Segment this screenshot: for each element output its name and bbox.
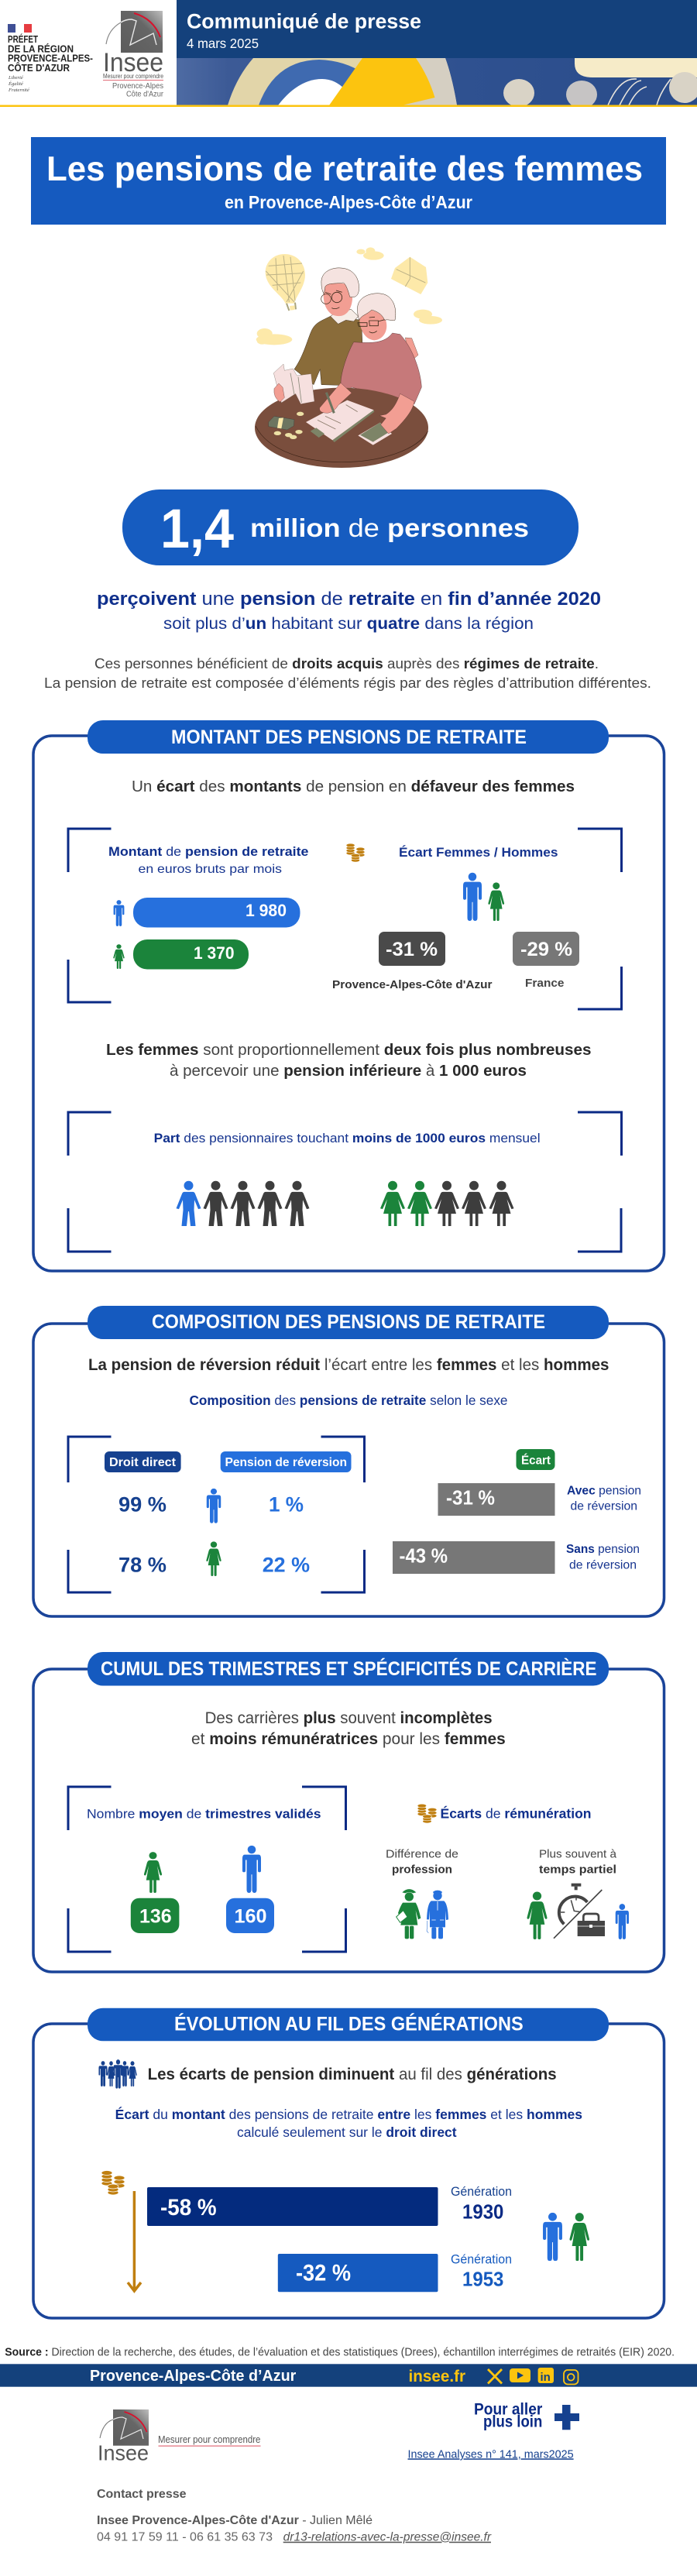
- chart title: écart: Écart Femmes / Hommes: [399, 845, 558, 860]
- main title: Les pensions de retraite des femmes: [46, 150, 643, 188]
- label: temps partiel: Plus souvent à: [539, 1847, 617, 1860]
- row: men: 1 %: [269, 1493, 304, 1516]
- press contact: Insee Provence-Alpes-Côte d'Azur - Julien Mêlé: [97, 2514, 373, 2527]
- panel: cumul des trimestres: [33, 1652, 664, 1972]
- press contact: 04 91 17 59 11 - 06 61 35 63 73: [97, 2531, 273, 2544]
- chart title: Écart du montant des pensions de retraite entre les femmes et les hommes: [115, 2106, 582, 2122]
- row: women: 78 %: [118, 1553, 167, 1576]
- section heading: [88, 2008, 609, 2041]
- section heading: MONTANT DES PENSIONS DE RETRAITE: [171, 726, 527, 748]
- intro text: definition: Ces personnes bénéficient de droits acquis auprès des régimes de retraite.: [94, 655, 599, 671]
- bar: men 1980: [114, 898, 300, 928]
- section heading: ÉVOLUTION AU FIL DES GÉNÉRATIONS: [174, 2013, 524, 2035]
- press contact: dr13-relations-avec-la-presse@insee.fr: [283, 2531, 492, 2544]
- press contact: Contact presse: [97, 2488, 187, 2501]
- intro text: definition: La pension de retraite est composée d’éléments régis par des règles d’attribution différentes.: [44, 675, 651, 691]
- bar: women 1370: 1 370: [194, 943, 234, 963]
- bar: génération 1953: Génération: [451, 2252, 512, 2266]
- column header: droit direct: [105, 1451, 181, 1472]
- intro text: recipients: perçoivent une pension de retraite en fin d’année 2020: [97, 589, 601, 610]
- section lead text: [191, 1709, 506, 1748]
- logo: Préfet de la région: CÔTE D'AZUR: [8, 62, 70, 74]
- section lead text: La pension de réversion réduit l’écart entre les femmes et les hommes: [88, 1355, 609, 1374]
- press release band: 4 mars 2025: [187, 36, 259, 51]
- intro text: recipients: [97, 589, 601, 633]
- chart title: [115, 2106, 582, 2140]
- icon: part-time woman, stopwatch, briefcase, man: [527, 1884, 629, 1939]
- section lead text: Les écarts de pension diminuent au fil des générations: [148, 2065, 557, 2083]
- source note: Source : Direction de la recherche, des études, de l’évaluation et des statistiques (Drees), échantillon interrégimes de retraités (EIR) 2020.: [5, 2347, 675, 2359]
- logo: Préfet de la région: Liberté: [8, 75, 24, 81]
- logo: Préfet de la région: [8, 24, 93, 93]
- logo: Préfet de la région: DE LA RÉGION: [8, 43, 74, 54]
- badge: écart: [516, 1449, 555, 1470]
- stat: -31 % region: -31 %: [386, 939, 438, 960]
- decorative banner image: [177, 58, 697, 108]
- logo: Préfet de la région: Égalité: [8, 81, 24, 87]
- section heading: COMPOSITION DES PENSIONS DE RETRAITE: [152, 1311, 545, 1333]
- label: temps partiel: [539, 1847, 617, 1876]
- subtitle: en Provence-Alpes-Côte d’Azur: [225, 192, 472, 212]
- chart title: montant: [108, 844, 308, 876]
- logo: Insee: [103, 11, 163, 99]
- bar: sans réversion: [393, 1541, 640, 1574]
- bar: génération 1930: -58 %: [160, 2195, 217, 2221]
- press contact: [97, 2488, 492, 2544]
- bar: sans réversion: de réversion: [569, 1559, 637, 1572]
- bar: avec réversion: [438, 1483, 641, 1516]
- row: women: [118, 1541, 310, 1576]
- arrow: decreasing gap: [128, 2191, 141, 2291]
- stat: men 160: [226, 1846, 274, 1933]
- logo: Préfet de la région: Fraternité: [8, 88, 30, 93]
- unit: million de personnes: [250, 513, 529, 542]
- section lead text: Un écart des montants de pension en défaveur des femmes: [132, 778, 575, 795]
- bar: génération 1953: [278, 2252, 512, 2292]
- further reading: plus loin: [483, 2412, 542, 2430]
- key message: à percevoir une pension inférieure à 1 000 euros: [170, 1062, 527, 1080]
- region name: Provence-Alpes-Côte d’Azur: [90, 2367, 296, 2385]
- section heading: [88, 720, 609, 754]
- title panel: [31, 137, 666, 225]
- bar: avec réversion: Avec pension: [567, 1484, 641, 1497]
- bar: avec réversion: de réversion: [570, 1499, 637, 1513]
- chart title: part: Part des pensionnaires touchant moins de 1000 euros mensuel: [154, 1132, 541, 1145]
- bar: sans réversion: Sans pension: [566, 1543, 640, 1556]
- stat: women 136: 136: [139, 1906, 172, 1928]
- icon: coins: [346, 843, 365, 862]
- logo: Insee footer: Mesurer pour comprendre: [158, 2433, 260, 2445]
- stat: -29 % France: France: [525, 977, 564, 990]
- bar: women 1370: [113, 939, 249, 970]
- column header: droit direct: Droit direct: [109, 1456, 176, 1469]
- panel: montant des pensions: [33, 720, 664, 1271]
- chart title: Composition des pensions de retraite selon le sexe: [189, 1393, 508, 1408]
- stat: -29 % France: [513, 932, 579, 990]
- stat: -29 % France: -29 %: [520, 939, 572, 960]
- logo: Insee: Provence-Alpes: [112, 81, 163, 91]
- column header: pension de réversion: Pension de réversion: [225, 1456, 347, 1469]
- icon: coins: [101, 2170, 125, 2195]
- logo: Insee: Insee: [103, 48, 163, 77]
- logo: Insee footer: Insee: [98, 2441, 149, 2465]
- illustration: elderly couple at a table: [255, 247, 442, 468]
- label: profession: Différence de: [386, 1847, 458, 1860]
- icon: group of people: [98, 2059, 137, 2089]
- icon: coins: [417, 1804, 437, 1823]
- intro text: definition: [44, 655, 651, 691]
- bar: génération 1930: 1930: [462, 2200, 503, 2223]
- bar: avec réversion: -31 %: [446, 1486, 495, 1510]
- bar: génération 1930: [147, 2185, 512, 2226]
- pictogram: women 2 in 5: [380, 1181, 514, 1226]
- icon: YouTube: [510, 2368, 530, 2382]
- logo: Préfet de la région: PRÉFET: [8, 33, 38, 45]
- chart title: montant: Montant de pension de retraite: [108, 844, 308, 859]
- site link: insee.fr: [409, 2367, 466, 2385]
- chart title: trimestres: Nombre moyen de trimestres validés: [87, 1807, 321, 1821]
- logo: Insee: Côte d'Azur: [126, 90, 163, 99]
- header: logos and press release banner: [0, 0, 697, 108]
- stat: men 160: 160: [234, 1906, 266, 1928]
- row: women: 22 %: [263, 1553, 310, 1576]
- icon: X: [488, 2369, 502, 2384]
- section heading: [88, 1652, 609, 1685]
- row: men: 99 %: [118, 1493, 167, 1516]
- label: temps partiel: temps partiel: [539, 1863, 616, 1876]
- icon: LinkedIn: in: [541, 2371, 551, 2384]
- stat: -31 % region: Provence-Alpes-Côte d'Azur: [332, 978, 493, 991]
- press release band: Communiqué de presse: [187, 9, 421, 33]
- label: profession: [386, 1847, 458, 1876]
- bar: génération 1930: Génération: [451, 2185, 512, 2199]
- key message: Les femmes sont proportionnellement deux fois plus nombreuses: [106, 1041, 592, 1059]
- stat: women 136: [131, 1852, 179, 1933]
- further reading: [407, 2399, 579, 2461]
- row: men: [118, 1489, 304, 1523]
- intro text: recipients: soit plus d’un habitant sur quatre dans la région: [163, 614, 534, 633]
- panel: évolution au fil des générations: [33, 2008, 664, 2318]
- further reading: Pour aller: [474, 2399, 543, 2418]
- icon: man and woman: [463, 873, 504, 921]
- section heading: CUMUL DES TRIMESTRES ET SPÉCIFICITÉS DE CARRIÈRE: [101, 1657, 596, 1680]
- logo: Insee footer: [98, 2409, 260, 2465]
- footer band: [0, 2364, 697, 2387]
- bar: sans réversion: -43 %: [400, 1544, 448, 1568]
- chart title: rémunération: Écarts de rémunération: [440, 1805, 591, 1821]
- badge: écart: Écart: [521, 1455, 551, 1468]
- icon: Instagram: [564, 2370, 578, 2384]
- chart title: calculé seulement sur le droit direct: [237, 2124, 457, 2140]
- number: 1,4: [160, 499, 234, 560]
- bar: génération 1953: 1953: [462, 2268, 503, 2291]
- column header: pension de réversion: [221, 1451, 352, 1472]
- icon: plus: [555, 2405, 579, 2430]
- icon: LinkedIn: [538, 2368, 554, 2384]
- key figure pill: [122, 489, 579, 565]
- logo: Insee: Mesurer pour comprendre: [103, 73, 163, 80]
- bar: men 1980: 1 980: [245, 901, 287, 920]
- panel: composition des pensions: [33, 1306, 664, 1616]
- key message: [106, 1041, 592, 1080]
- chart title: montant: en euros bruts par mois: [138, 863, 282, 876]
- label: profession: profession: [392, 1863, 452, 1876]
- pictogram: men 1 in 5: [177, 1181, 310, 1226]
- section lead text: et moins rémunératrices pour les femmes: [191, 1730, 506, 1748]
- logo: Préfet de la région: PROVENCE-ALPES-: [8, 53, 93, 64]
- bar: génération 1953: -32 %: [296, 2260, 351, 2286]
- section heading: [88, 1306, 609, 1339]
- link: publication: Insee Analyses n° 141, mars2025: [407, 2447, 574, 2461]
- section lead text: Des carrières plus souvent incomplètes: [205, 1709, 493, 1727]
- icon: man and woman: [543, 2213, 589, 2261]
- press release band: [177, 0, 697, 58]
- stat: -31 % region: [332, 932, 493, 991]
- icon: nurse and doctor: [397, 1889, 448, 1939]
